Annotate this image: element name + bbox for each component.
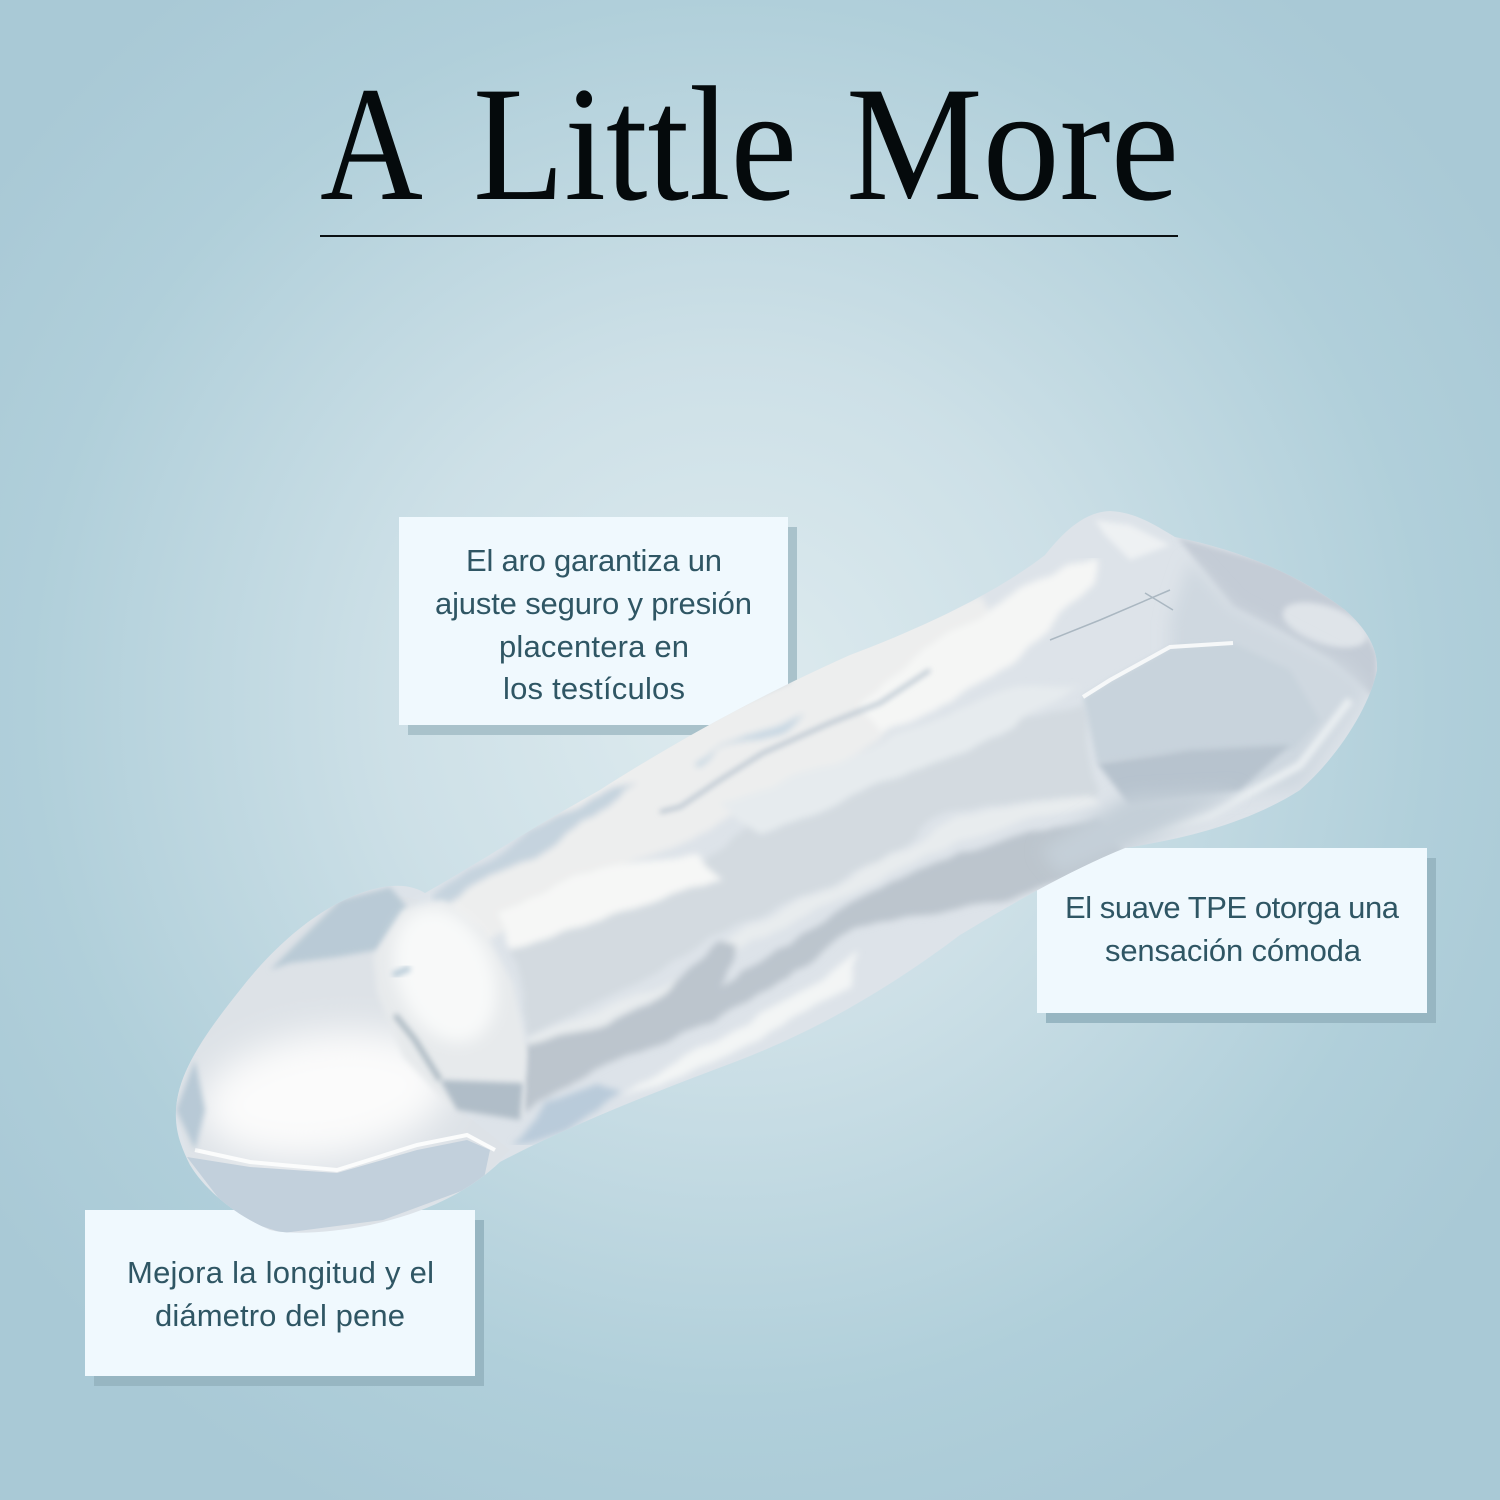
open end with cap shading <box>1040 520 1377 875</box>
callout: ring fit: los testículos <box>503 671 685 706</box>
callout: length and diameter: diámetro del pene <box>155 1298 405 1333</box>
title: More <box>846 54 1179 235</box>
title: Little <box>473 54 797 235</box>
title <box>320 54 1179 235</box>
callout: soft TPE <box>1037 848 1436 1023</box>
rounded end <box>176 887 510 1233</box>
product: clear sleeve <box>150 490 1400 1260</box>
callout: ring fit <box>399 517 797 735</box>
callout: length and diameter: Mejora la longitud y el <box>127 1255 434 1290</box>
callout: soft TPE: sensación cómoda <box>1105 933 1362 968</box>
callout: ring fit: placentera en <box>499 629 689 664</box>
callout: ring fit: ajuste seguro y presión <box>435 586 752 621</box>
shaft body <box>430 558 1125 1145</box>
surface creases <box>658 668 932 816</box>
ridge <box>373 892 527 1120</box>
callout: ring fit: El aro garantiza un <box>466 543 722 578</box>
callout: soft TPE: El suave TPE otorga una <box>1065 890 1400 925</box>
callout: length and diameter <box>85 1210 484 1386</box>
title underline <box>320 235 1178 237</box>
title: A <box>320 54 423 235</box>
